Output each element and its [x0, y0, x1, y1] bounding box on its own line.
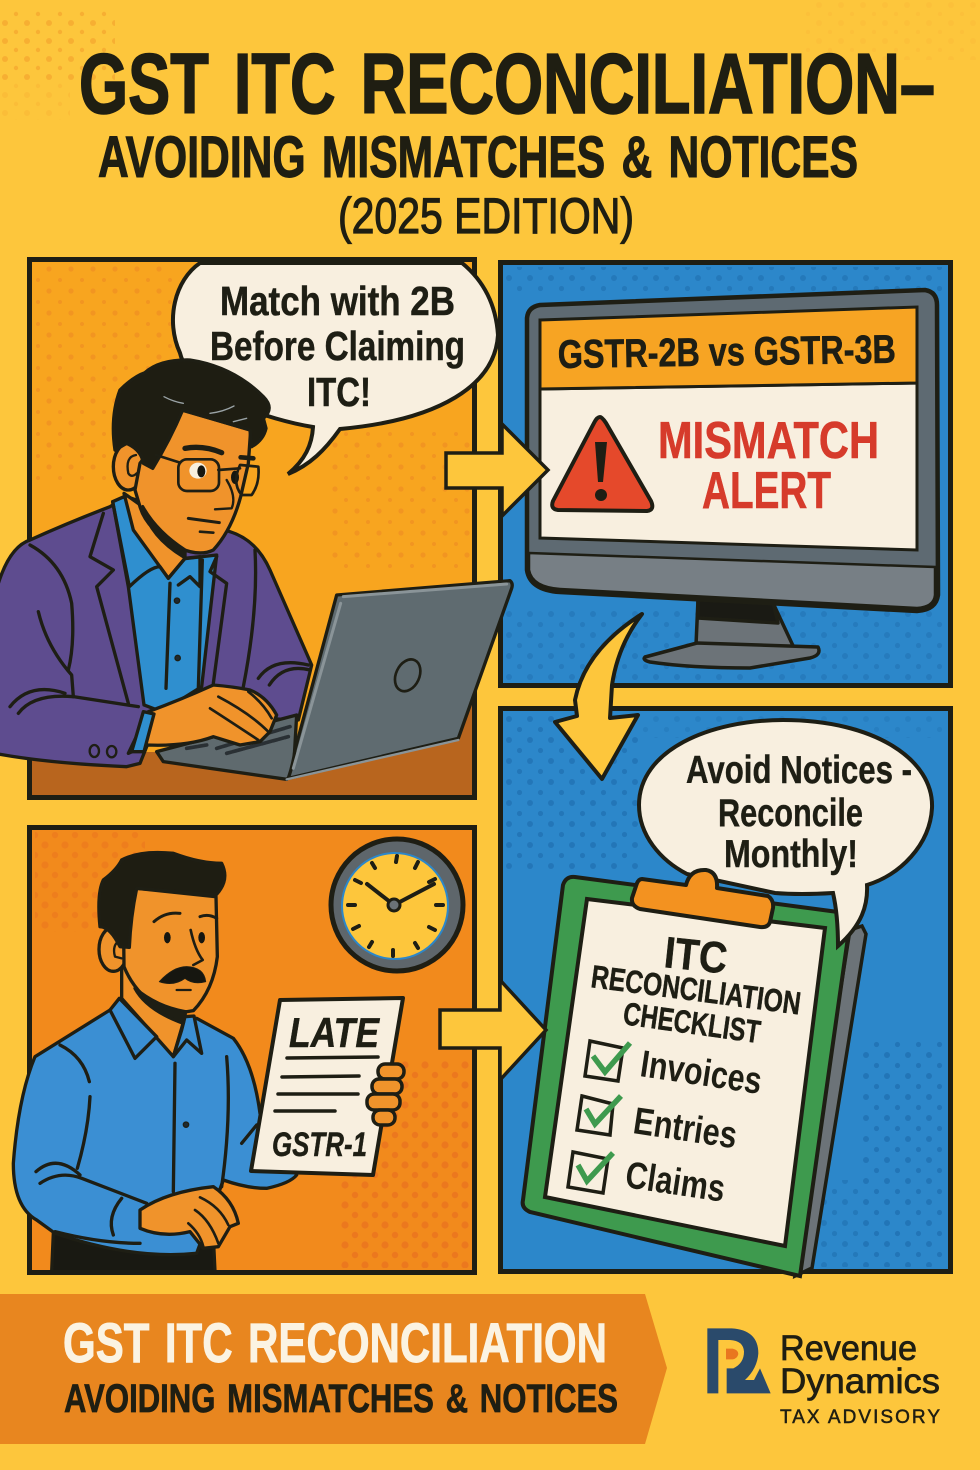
- glasses: [156, 455, 240, 470]
- trousers: [52, 1233, 215, 1272]
- checklist item: claims: [568, 1152, 728, 1211]
- hair: [113, 360, 269, 468]
- speech bubble: avoid notices: Reconcile: [718, 792, 863, 835]
- checklist heading: ITC: [662, 928, 730, 984]
- late form document: GSTR-1: [272, 1126, 367, 1164]
- panel: mismatch alert monitor: [500, 262, 950, 686]
- speech bubble: match with 2B: [173, 263, 498, 474]
- shirt button: [183, 1122, 189, 1127]
- logo tagline: TAX ADVISORY: [780, 1407, 940, 1428]
- monitor stand: [644, 600, 819, 668]
- shirt buttons: [174, 598, 180, 603]
- eyebrows: [154, 913, 217, 922]
- panel: checklist: [500, 708, 950, 1276]
- arrow: panel 1 to panel 2: [446, 424, 548, 516]
- mouth: [177, 986, 191, 993]
- logo mark: [707, 1328, 771, 1393]
- title line 3: (2025 EDITION): [338, 188, 634, 244]
- speech bubble: avoid notices: Avoid Notices -: [686, 749, 912, 792]
- logo: Revenue Dynamics: [707, 1328, 940, 1428]
- ear: [113, 443, 143, 490]
- collar and lapels: [10, 502, 310, 713]
- checklist content: [568, 928, 803, 1211]
- monitor screen: [540, 307, 917, 550]
- hair: [99, 852, 225, 947]
- checklist heading: [589, 928, 803, 1050]
- panel: match with 2B: [30, 260, 474, 798]
- hand holding document: [367, 1064, 404, 1125]
- eyes: [164, 932, 171, 943]
- alert text: MISMATCH: [658, 412, 879, 470]
- hand: [128, 685, 277, 753]
- shirt: [13, 1010, 297, 1255]
- shirt: [113, 497, 217, 712]
- checklist heading: RECONCILIATION: [589, 958, 803, 1021]
- checklist item: claims: Claims: [623, 1154, 728, 1211]
- man holding late form: [13, 852, 297, 1272]
- desk: [32, 752, 472, 795]
- face: [135, 410, 251, 553]
- icon: warning triangle: [552, 417, 652, 511]
- checklist paper: [545, 899, 825, 1246]
- shirt folds: [36, 1045, 257, 1243]
- checklist item: invoices: [585, 1041, 765, 1103]
- vertical gap strip: [477, 256, 498, 1278]
- checklist item: entries: [577, 1096, 740, 1157]
- panel: late filing: [30, 828, 474, 1272]
- jacket sleeve buttons: [90, 745, 99, 757]
- ear: [99, 927, 128, 971]
- checklist item: entries: Entries: [631, 1100, 740, 1157]
- person with laptop: [0, 360, 512, 779]
- speech bubble: match with 2B: Match with 2B: [220, 278, 455, 324]
- laptop screen: [288, 581, 512, 778]
- horizontal gap strip: [498, 688, 954, 706]
- moustache: [159, 967, 206, 984]
- alert text: ALERT: [702, 462, 831, 520]
- arrow: panel 3 to checklist: [440, 980, 546, 1080]
- logo wordmark: Revenue: [780, 1329, 917, 1368]
- laptop base: [157, 715, 297, 779]
- eyebrows: [185, 447, 222, 453]
- clipboard: [523, 877, 866, 1276]
- hand: [140, 1187, 238, 1248]
- late form document: [251, 998, 403, 1175]
- banner subheading: AVOIDING MISMATCHES & NOTICES: [64, 1377, 618, 1421]
- collar: [110, 998, 157, 1058]
- monitor chin: [529, 553, 935, 608]
- speech bubble: match with 2B: ITC!: [307, 369, 371, 415]
- nose: [191, 930, 203, 965]
- speech bubble: avoid notices: [639, 720, 932, 946]
- checklist item: invoices: Invoices: [638, 1043, 765, 1103]
- arrow: panel 2 down to checklist: [555, 614, 642, 779]
- alert text: [658, 412, 879, 520]
- monitor screen: GSTR-2B vs GSTR-3B: [557, 328, 896, 377]
- footer banner: [0, 1294, 667, 1444]
- jacket: [0, 497, 312, 767]
- logo: Revenue Dynamics: Dynamics: [780, 1362, 940, 1401]
- speech bubble: avoid notices: Monthly!: [724, 833, 858, 876]
- speech bubble: match with 2B: Before Claiming: [210, 323, 465, 369]
- neck: [124, 493, 185, 578]
- nose and mouth: [215, 480, 233, 509]
- hair highlights: [164, 397, 247, 422]
- title: [79, 37, 935, 244]
- banner heading: GST ITC RECONCILIATION: [63, 1311, 607, 1374]
- face: [123, 888, 217, 1012]
- wall clock: [331, 839, 463, 971]
- clipboard clip: [632, 870, 773, 927]
- neck: [122, 963, 187, 1057]
- checklist heading: CHECKLIST: [621, 995, 763, 1050]
- monitor frame: [527, 290, 938, 611]
- eyes: [189, 463, 207, 479]
- late form document: LATE: [289, 1009, 381, 1056]
